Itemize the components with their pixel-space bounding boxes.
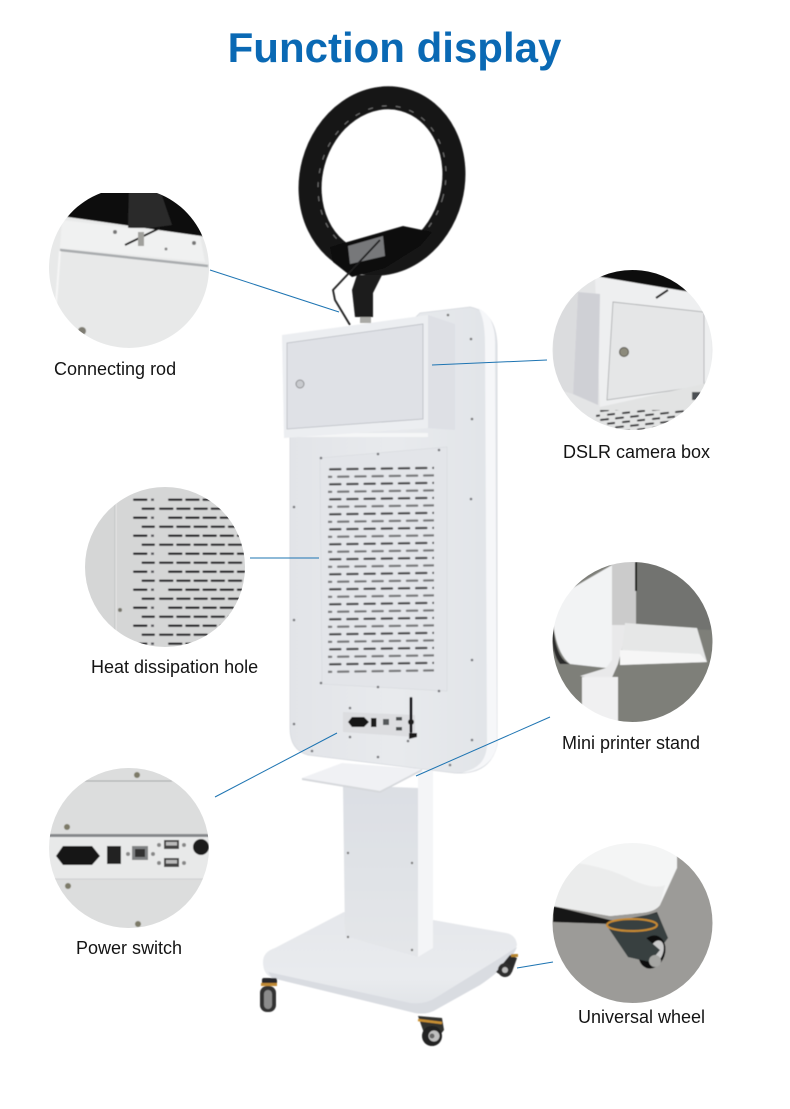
caster: front left: [260, 978, 277, 1012]
column: [343, 770, 433, 957]
main back panel: [290, 307, 497, 773]
base plate: [263, 912, 517, 1014]
camera box: [282, 314, 473, 438]
ring light: [292, 81, 472, 325]
detail circle: universal wheel: [550, 840, 716, 1006]
connector panel: [343, 697, 417, 739]
product: photo booth stand: [260, 81, 518, 1046]
label: heat dissipation hole: Heat dissipation hole: [91, 657, 258, 677]
leader lines: [210, 270, 553, 968]
ventilation plate: [320, 447, 447, 691]
label: universal wheel: Universal wheel: [578, 1007, 705, 1027]
detail circle: power switch: [46, 765, 212, 931]
label: power switch: Power switch: [76, 938, 182, 958]
caster: back right: [496, 954, 518, 977]
mini printer shelf: [302, 763, 422, 793]
label: DSLR camera box: DSLR camera box: [563, 442, 710, 462]
caster: front centre: [418, 1016, 444, 1046]
label: mini printer stand: Mini printer stand: [562, 733, 700, 753]
detail circle: heat dissipation hole: [82, 484, 248, 650]
label: connecting rod: Connecting rod: [54, 359, 176, 379]
panel screws: [293, 449, 473, 766]
title: Function display: [228, 24, 562, 71]
detail circle: mini printer stand: [550, 560, 716, 725]
detail circle: DSLR camera box: [550, 268, 716, 434]
detail circle: connecting rod: [45, 190, 215, 350]
